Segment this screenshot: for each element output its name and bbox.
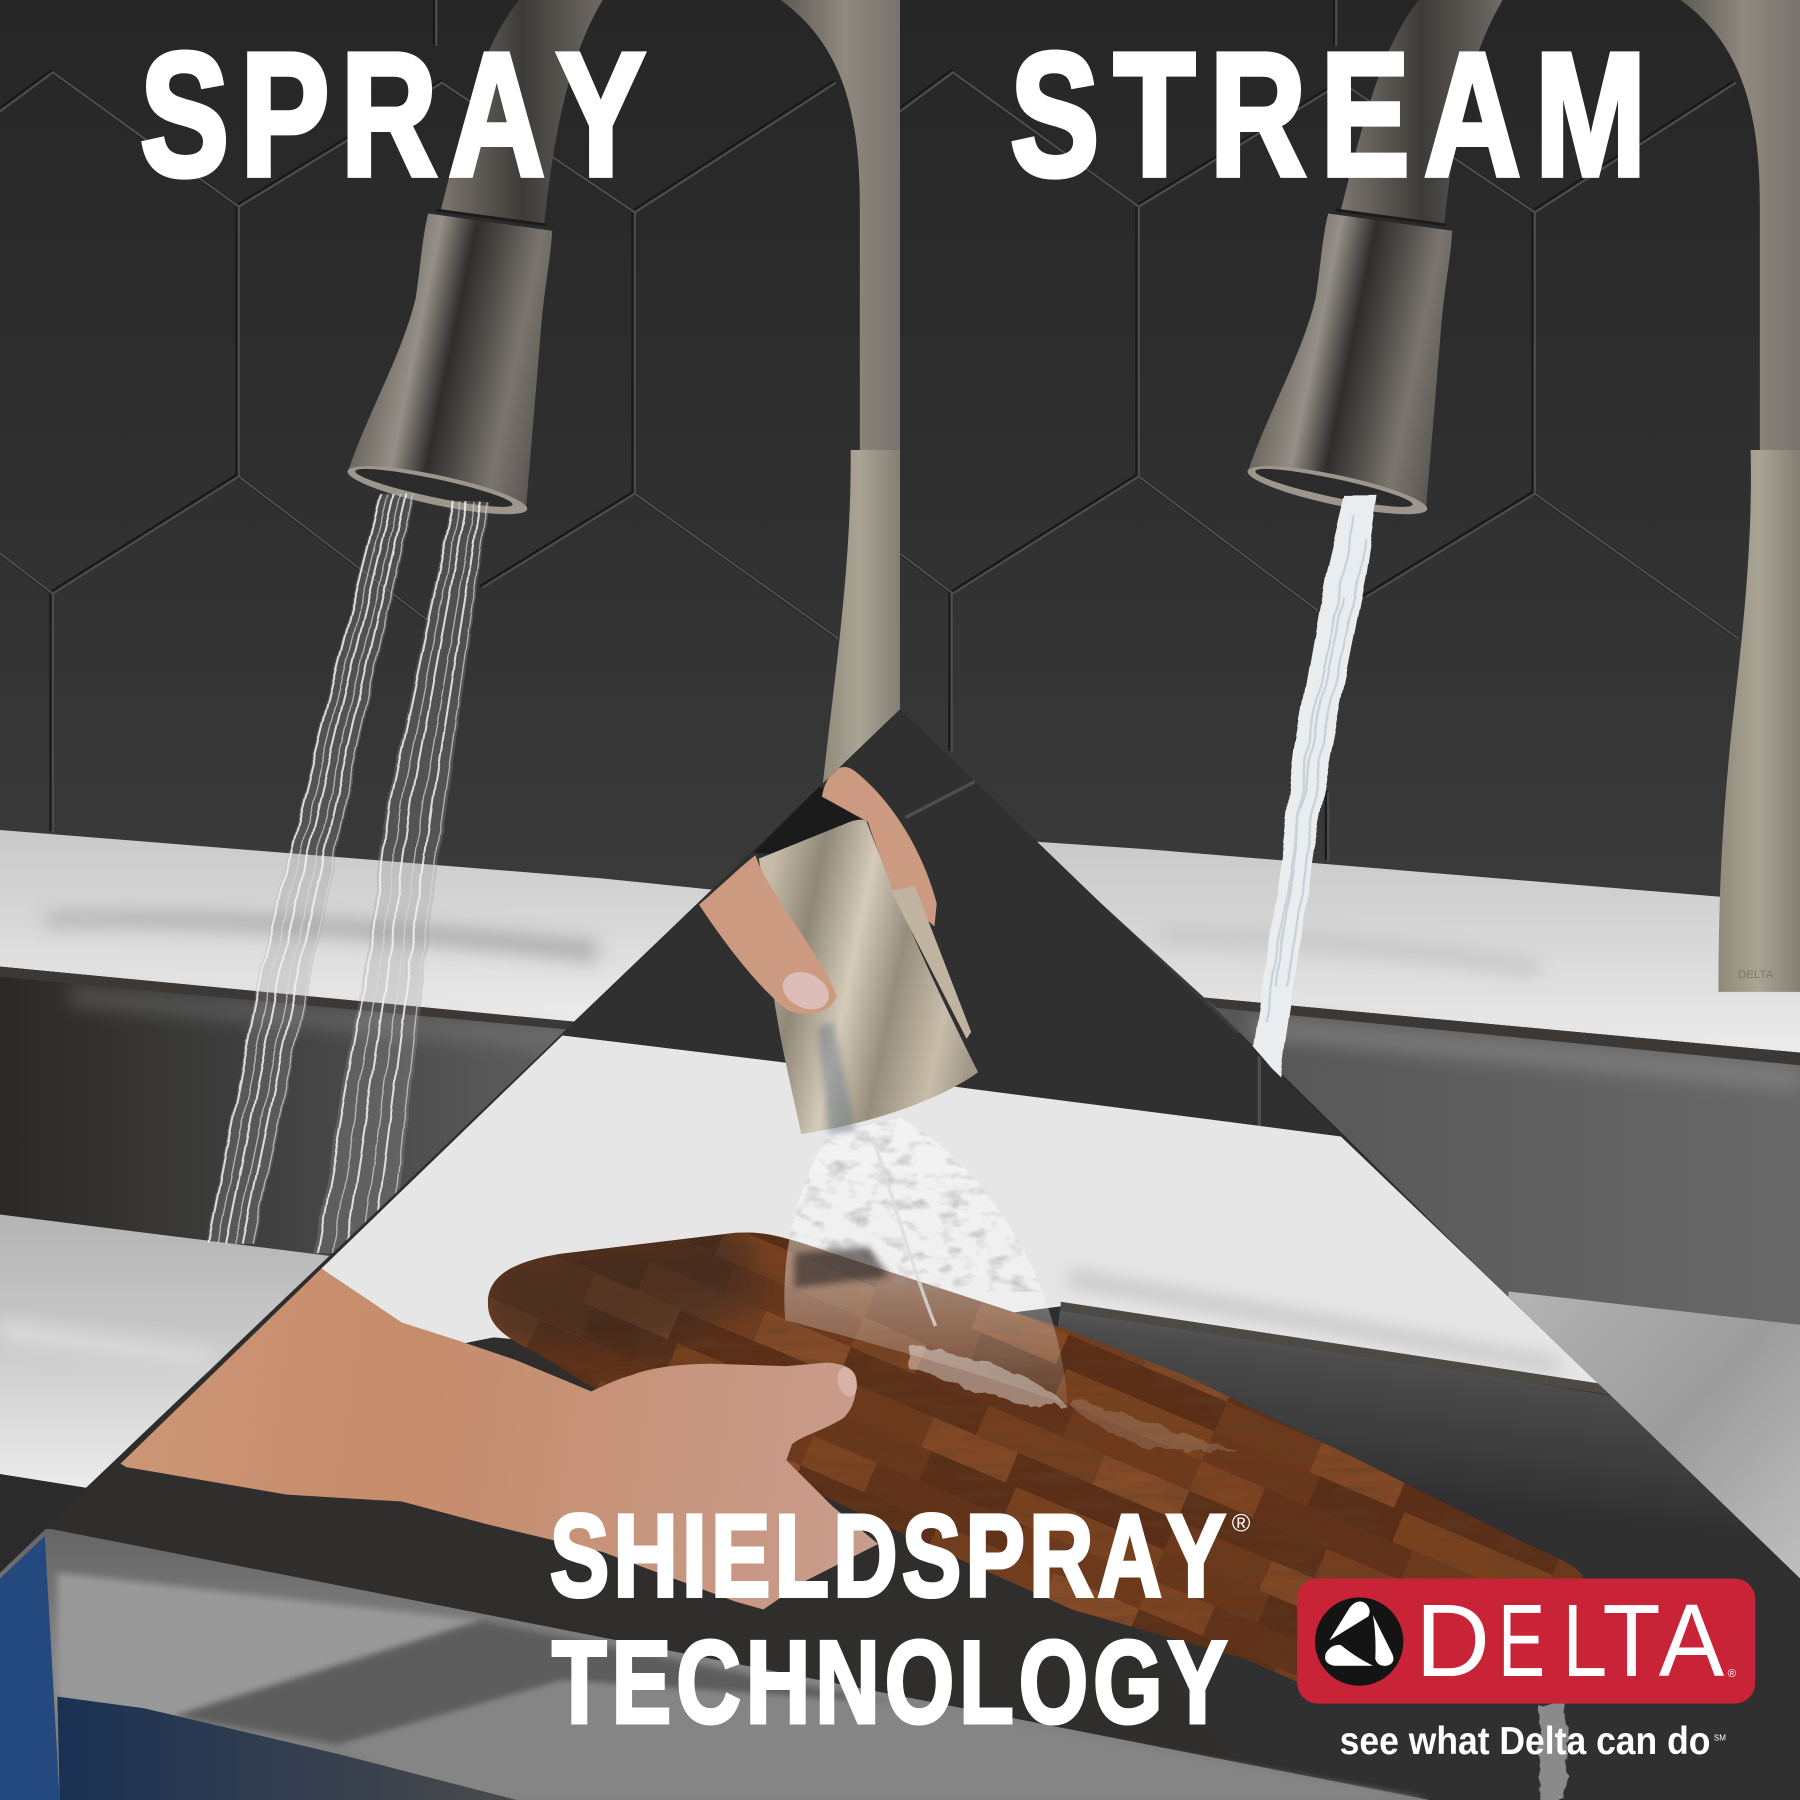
logo wordmark: A [1659, 1584, 1724, 1699]
counter: white countertop [321, 1035, 1611, 1395]
faucet: spout and body [441, 0, 907, 804]
title: shieldspray technology [550, 1492, 1251, 1748]
sink: dark basin right [1058, 1306, 1735, 1518]
sink: right basin [1204, 998, 1800, 1332]
water: spray streams [207, 494, 489, 1254]
sink: floor [0, 1529, 1429, 1800]
panel: shieldspray photo [0, 689, 1800, 1800]
water: solid stream [1254, 496, 1378, 1079]
clothing: blue shirt [0, 1536, 517, 1800]
wand body [759, 820, 978, 1134]
title: shieldspray technology: SHIELDSPRAY [550, 1492, 1230, 1622]
water: drain trickle [1538, 1705, 1568, 1800]
counter: back ledge [1033, 841, 1800, 1053]
logo wordmark: L [1562, 1582, 1607, 1698]
logo: delta badge [1297, 1578, 1755, 1704]
logo wordmark: D [1415, 1582, 1490, 1698]
title: shieldspray technology: TECHNOLOGY [552, 1618, 1232, 1748]
counter: lower ledge [0, 1215, 329, 1488]
counter: back ledge [0, 830, 712, 1022]
logo wordmark: T [1603, 1583, 1661, 1699]
faucet: spray head [344, 210, 552, 524]
logo wordmark: E [1498, 1582, 1545, 1698]
sink: left basin [0, 967, 574, 1256]
faucet: spout and body: DELTA [1738, 969, 1774, 981]
title: shieldspray technology: ® [1232, 1509, 1251, 1537]
title: stream: STREAM [1010, 17, 1661, 213]
tagline: SM [1714, 1733, 1726, 1742]
water: shield bell [784, 1118, 1240, 1452]
panel: spray mode photo [0, 0, 907, 1488]
logo wordmark [1415, 1582, 1737, 1699]
faucet spray wand [699, 767, 978, 1134]
panel: stream mode photo [898, 0, 1800, 1607]
hand: upper fingers [822, 767, 937, 926]
counter: lower ledge [1508, 1291, 1800, 1607]
logo wordmark: ® [1728, 1668, 1737, 1680]
faucet: spout and body [1341, 0, 1800, 992]
faucet: stream head [1244, 210, 1452, 524]
tagline: see what Delta can do [1340, 1720, 1710, 1763]
hand: thumb [699, 855, 837, 1014]
title: spray: SPRAY [140, 17, 657, 213]
hand: hand on cutting board [121, 1268, 878, 1609]
cutting board [488, 1232, 1583, 1682]
icon: delta symbol [1315, 1597, 1403, 1686]
